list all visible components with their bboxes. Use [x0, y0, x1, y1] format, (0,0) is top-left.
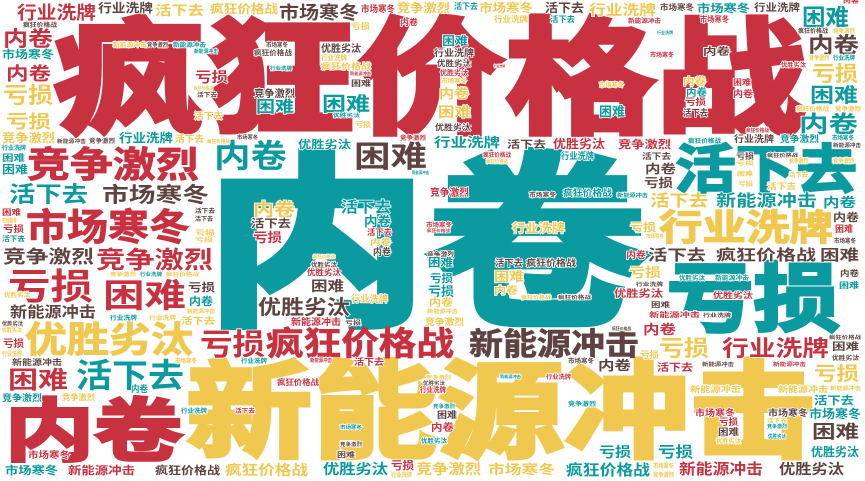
small words: inside 内卷: 亏损: [195, 228, 215, 239]
small words: right of 内卷 and around 活下去: 新能源冲击: [716, 187, 817, 211]
small words: bottom edge: 行业洗牌: [391, 470, 412, 479]
small words: left column: 疯狂价格战: [166, 271, 199, 278]
small words: right side middle: 内卷: [626, 248, 646, 261]
word: 内卷 red: 内卷: [5, 376, 183, 475]
word: 行业洗牌 yellow: 行业洗牌: [659, 199, 833, 251]
word: 困难 brown centre: 困难: [354, 132, 427, 176]
small words: inside and around 疯 and 狂: [57, 17, 418, 152]
small words: inside 新能源冲击: 困难: [437, 408, 457, 421]
small words: inside 战 and upper right: [650, 26, 861, 149]
small words: inside 新能源冲击: 市场寒冬: [695, 406, 735, 419]
small words: top edge: 活下去: [454, 1, 478, 12]
small words: right side middle: 疯狂价格战: [612, 325, 631, 332]
small words: bottom edge: 市场寒冬: [488, 459, 555, 478]
small words: inside 新能源冲击: 困难: [812, 418, 859, 444]
small words: right side middle: 新能源冲击: [715, 273, 749, 282]
small words: inside 内卷: 行业洗牌: [351, 292, 388, 305]
small words: inside 战 and upper right: 竞争激烈: [835, 104, 861, 113]
word: 亏损 red left: 亏损: [8, 258, 93, 310]
small words: inside 内卷: 优胜劣汰: [307, 267, 341, 278]
small words: left column: 内卷: [189, 293, 213, 309]
small words: inside 内卷: 亏损: [345, 318, 361, 327]
small words: inside 内卷: 活下去: [195, 214, 213, 223]
small words: top edge: 市场寒冬: [700, 14, 729, 25]
small words: right of 内卷 and around 活下去: 亏损: [736, 160, 754, 167]
small words: inside and around 疯 and 狂: 疯狂价格战: [207, 138, 230, 145]
small words: inside 新能源冲击: 活下去: [657, 359, 693, 374]
small words: inside 内卷: 亏损: [430, 270, 453, 286]
small words: inside 新能源冲击: 新能源冲击: [778, 384, 828, 395]
small words: bottom edge: 市场寒冬: [5, 462, 58, 478]
small words: right of 内卷 and around 活下去: 市场寒冬: [646, 233, 664, 240]
small words: inside 战 and upper right: 内卷: [733, 87, 753, 100]
small words: inside and around 疯 and 狂: 亏损: [195, 67, 228, 87]
small words: inside 内卷: 疯狂价格战: [526, 256, 576, 269]
small words: inside 内卷: 疯狂价格战: [521, 294, 551, 301]
small words: inside 价 and 格: 困难: [599, 101, 625, 120]
small words: inside 内卷: 亏损: [253, 227, 282, 246]
small words: inside 内卷: 竞争激烈: [427, 250, 454, 260]
small words: inside 新能源冲击: 活下去: [814, 392, 854, 408]
small words: inside 新能源冲击: 行业洗牌: [420, 385, 446, 395]
small words: inside 战 and upper right: 内卷: [683, 73, 706, 88]
small words: inside and around 疯 and 狂: 行业洗牌: [119, 129, 173, 146]
small words: bottom edge: 疯狂价格战: [155, 462, 220, 478]
small words: left column: 竞争激烈: [2, 129, 55, 146]
small words: inside 新能源冲击: 市场寒冬: [809, 405, 861, 422]
small words: left column: 行业洗牌: [2, 143, 26, 152]
small words: left column: 优胜劣汰: [4, 290, 30, 299]
small words: top edge: 疯狂价格战: [210, 0, 278, 17]
small words: inside 新能源冲击: 市场寒冬: [340, 424, 362, 431]
small words: top edge: 活下去: [550, 14, 575, 25]
small words: inside 新能源冲击: 优胜劣汰: [811, 443, 859, 460]
small words: right side middle: 优胜劣汰: [679, 273, 705, 282]
small words: inside 价 and 格: 行业洗牌: [434, 132, 500, 151]
small words: inside 新能源冲击: 内卷: [431, 419, 454, 434]
small words: right of 内卷 and around 活下去: 活下去: [789, 170, 808, 179]
small words: top edge: 市场寒冬: [660, 2, 694, 13]
small words: inside and around 疯 and 狂: 疯狂价格战: [321, 61, 371, 72]
small words: inside 战 and upper right: 行业洗牌: [657, 29, 673, 36]
small words: top edge: 行业洗牌: [589, 0, 656, 20]
small words: inside 战 and upper right: 疯狂价格战: [746, 127, 769, 134]
word: 新能源冲击: 新能源冲击: [186, 326, 816, 480]
small words: bottom edge: [5, 457, 844, 480]
small words: right of 内卷 and around 活下去: 困难: [835, 222, 853, 235]
word: 内卷 teal upper: 内卷: [214, 131, 287, 177]
small words: inside 新能源冲击: 疯狂价格战: [277, 377, 319, 388]
small words: left column: 亏损: [3, 222, 24, 235]
small words: inside and around 疯 and 狂: 内卷: [400, 17, 418, 28]
small words: left column: 活下去: [235, 406, 255, 415]
small words: inside 新能源冲击: 新能源冲击: [702, 361, 734, 368]
small words: inside 内卷: 活下去: [195, 206, 215, 215]
small words: right side middle: 优胜劣汰: [713, 290, 753, 301]
word: 内卷 large teal: 内卷: [206, 95, 648, 363]
small words: inside 新能源冲击: 内卷: [598, 355, 631, 374]
word: 新能源冲击 brown: 新能源冲击: [469, 319, 639, 364]
small words: inside and around 疯 and 狂: 市场寒冬: [266, 40, 288, 49]
small words: top edge: 行业洗牌: [494, 14, 528, 25]
small words: right side middle: [612, 244, 861, 363]
small words: left column: 行业洗牌: [2, 349, 22, 358]
small words: inside 价 and 格: 行业洗牌: [494, 63, 505, 68]
small words: inside 新能源冲击: 竞争激烈: [340, 441, 362, 448]
small words: right side middle: 内卷: [643, 319, 676, 338]
small words: left column: 竞争激烈: [62, 392, 95, 403]
small words: left column: [2, 20, 267, 461]
word: 疯狂价格战 red medium: 疯狂价格战: [266, 317, 454, 365]
small words: inside 新能源冲击: 新能源冲击: [830, 385, 861, 392]
small words: right of 内卷 and around 活下去: 疯狂价格战: [767, 152, 798, 159]
small words: inside and around 疯 and 狂: 市场寒冬: [237, 134, 258, 141]
small words: inside 价 and 格: 优胜劣汰: [440, 68, 468, 78]
small words: bottom edge: 疯狂价格战: [566, 459, 650, 480]
small words: inside 战 and upper right: 优胜劣汰: [781, 60, 806, 69]
small words: inside 新能源冲击: 亏损: [814, 359, 859, 386]
small words: inside 新能源冲击: 新能源冲击: [773, 361, 806, 368]
small words: left column: 优胜劣汰: [2, 319, 23, 328]
small words: right side middle: 内卷: [840, 268, 859, 279]
small words: right side middle: 困难: [820, 244, 859, 265]
small words: bottom edge: 市场寒冬: [653, 461, 674, 470]
small words: inside 内卷: 内卷: [370, 237, 391, 248]
small words: inside 内卷: 疯狂价格战: [483, 150, 511, 159]
small words: inside 内卷: 内卷: [373, 245, 391, 258]
small words: inside 新能源冲击: 新能源冲击: [500, 373, 521, 380]
small words: inside 价 and 格: [400, 32, 671, 152]
small words: right side middle: 困难: [651, 300, 670, 310]
small words: inside 战 and upper right: 市场寒冬: [650, 50, 674, 59]
small words: inside 新能源冲击: 活下去: [354, 355, 384, 368]
small words: right of 内卷 and around 活下去: [630, 151, 859, 245]
small words: left column: 行业洗牌: [110, 313, 137, 322]
small words: inside 战 and upper right: 市场寒冬: [832, 133, 854, 142]
small words: inside 新能源冲击: 竞争激烈: [568, 399, 596, 408]
small words: inside 内卷: 困难: [311, 276, 344, 296]
small words: inside 内卷: 行业洗牌: [561, 149, 594, 162]
small words: inside 新能源冲击: 行业洗牌: [546, 372, 571, 381]
small words: inside 新能源冲击: 竞争激烈: [767, 423, 787, 430]
small words: left column: 市场寒冬: [175, 356, 197, 365]
small words: right side middle: 亏损: [640, 348, 659, 361]
small words: inside 战 and upper right: 竞争激烈: [780, 132, 819, 145]
small words: right side middle: 疯狂价格战: [829, 334, 861, 341]
small words: inside 战 and upper right: 疯狂价格战: [798, 26, 828, 35]
small words: right side middle: 困难: [832, 338, 859, 353]
small words: right of 内卷 and around 活下去: 竞争激烈: [833, 156, 854, 165]
small words: inside 内卷: 疯狂价格战: [427, 227, 450, 234]
small words: left column: 内卷: [6, 60, 51, 86]
small words: right of 内卷 and around 活下去: 亏损: [644, 174, 673, 191]
small words: inside 价 and 格: 行业洗牌: [434, 46, 474, 59]
word: 竞争激烈 red: 竞争激烈: [27, 136, 199, 188]
small words: inside 战 and upper right: 内卷: [686, 84, 707, 99]
small words: inside 新能源冲击: 亏损: [599, 442, 631, 462]
small words: right of 内卷 and around 活下去: 内卷: [823, 192, 856, 211]
small words: left column: 新能源冲击: [187, 308, 215, 315]
small words: inside and around 疯 and 狂: 新能源冲击: [57, 138, 86, 145]
small words: inside and around 疯 and 狂: 竞争激烈: [147, 40, 168, 49]
small words: inside 战 and upper right: 内卷: [808, 28, 859, 60]
small words: left column: 行业洗牌: [140, 271, 162, 278]
small words: left column: 亏损: [3, 78, 53, 110]
small words: inside and around 疯 and 狂: 新能源冲击: [173, 40, 206, 49]
small words: left column: 竞争激烈: [3, 243, 94, 269]
small words: inside 内卷: 优胜劣汰: [258, 291, 350, 320]
small words: inside 内卷: 竞争激烈: [425, 315, 464, 328]
word: 优胜劣汰 yellow: 优胜劣汰: [25, 311, 193, 363]
small words: inside 价 and 格: 竞争激烈: [618, 136, 671, 152]
small words: bottom edge: 竞争激烈: [653, 470, 674, 479]
small words: bottom edge: 新能源冲击: [679, 458, 763, 479]
small words: inside 战 and upper right: 行业洗牌: [833, 53, 855, 62]
small words: left column: 活下去: [2, 234, 25, 244]
small words: inside 价 and 格: 竞争激烈: [400, 133, 426, 142]
small words: inside 内卷: 市场寒冬: [426, 220, 452, 229]
small words: inside 价 and 格: 市场寒冬: [599, 80, 624, 89]
small words: inside 内卷: 竞争激烈: [430, 184, 469, 199]
small words: left column: 亏损: [3, 335, 24, 350]
small words: inside 新能源冲击: 竞争激烈: [426, 374, 451, 381]
small words: inside 内卷: 亏损: [428, 281, 454, 300]
small words: inside and around 疯 and 狂: 竞争激烈: [254, 85, 295, 100]
small words: right of 内卷 and around 活下去: 亏损: [738, 179, 753, 188]
small words: inside and around 疯 and 狂: 困难: [256, 93, 294, 117]
small words: inside 内卷: 优胜劣汰: [311, 260, 337, 269]
small words: inside and around 疯 and 狂: 困难: [322, 88, 370, 117]
word: 亏损 teal: 亏损: [667, 238, 840, 347]
small words: inside 新能源冲击: 亏损: [719, 415, 738, 428]
small words: right side middle: 活下去: [648, 244, 706, 265]
small words: left column: 竞争激烈: [2, 391, 42, 404]
small words: inside and around 疯 and 狂: 新能源冲击: [350, 70, 371, 77]
small words: inside 价 and 格: 内卷: [439, 83, 469, 102]
small words: inside 新能源冲击: 困难: [337, 450, 355, 460]
small words: right side middle: 困难: [839, 280, 859, 291]
small words: inside 新能源冲击: 活下去: [767, 416, 787, 425]
small words: right side middle: 行业洗牌: [722, 331, 829, 363]
small words: inside 价 and 格: 市场寒冬: [441, 76, 467, 85]
small words: left column: 亏损: [6, 108, 51, 134]
small words: left column: 竞争激烈: [96, 240, 213, 275]
small words: inside 内卷: 内卷: [253, 196, 295, 222]
small words: inside 新能源冲击: 优胜劣汰: [423, 380, 445, 387]
small words: inside and around 疯 and 狂: 竞争激烈: [89, 136, 115, 145]
word: 活下去 teal lower left: 活下去: [76, 349, 184, 397]
small words: inside 内卷: 新能源冲击: [412, 169, 429, 176]
small words: inside 价 and 格: 困难: [442, 32, 468, 49]
small words: inside 内卷: 行业洗牌: [512, 219, 565, 236]
small words: inside 战 and upper right: 竞争激烈: [809, 53, 829, 62]
small words: left column: 新能源冲击: [10, 301, 96, 322]
small words: inside 价 and 格: 优胜劣汰: [553, 135, 605, 152]
small words: inside and around 疯 and 狂: 行业洗牌: [270, 65, 292, 72]
small words: inside 内卷: 亏损: [195, 235, 213, 244]
small words: inside 战 and upper right: 行业洗牌: [734, 132, 774, 145]
small words: inside 价 and 格: 优胜劣汰: [435, 122, 471, 133]
small words: inside 新能源冲击: 市场寒冬: [568, 356, 594, 365]
small words: inside 战 and upper right: 竞争激烈: [833, 26, 855, 35]
small words: inside 内卷: 新能源冲击: [427, 308, 458, 315]
small words: right of 内卷 and around 活下去: 活下去: [650, 187, 708, 211]
word: 市场寒冬 red: 市场寒冬: [26, 197, 190, 251]
small words: left column: 新能源冲击: [12, 357, 62, 368]
small words: right of 内卷 and around 活下去: 竞争激烈: [789, 156, 808, 165]
small words: inside and around 疯 and 狂: 疯狂价格战: [254, 48, 292, 58]
small words: inside 新能源冲击: 竞争激烈: [433, 403, 455, 410]
small words: left column: 行业洗牌: [181, 406, 207, 415]
small words: right side middle: 优胜劣汰: [614, 285, 663, 300]
small words: inside 内卷: 活下去: [495, 256, 523, 269]
small words: inside 内卷: 困难: [428, 254, 453, 270]
small words: inside 内卷: 新能源冲击: [291, 315, 341, 328]
small words: right of 内卷 and around 活下去: 困难: [737, 169, 753, 178]
small words: left column: 行业洗牌: [241, 356, 267, 365]
small words: inside and around 疯 and 狂: 活下去: [194, 109, 223, 122]
small words: inside 价 and 格: 困难: [438, 102, 471, 122]
small words: right side middle: 亏损: [629, 262, 661, 281]
small words: inside 内卷: 新能源冲击: [617, 192, 648, 199]
small words: left column: 亏损: [188, 279, 215, 295]
small words: left column: 优胜劣汰: [2, 325, 22, 334]
small words: left column: 市场寒冬: [102, 179, 209, 209]
small words: left column: 困难: [8, 360, 68, 395]
small words: bottom edge: 优胜劣汰: [779, 459, 844, 479]
small words: inside 新能源冲击: 新能源冲击: [690, 384, 741, 395]
small words: left column: 市场寒冬: [2, 216, 17, 225]
small words: inside 价 and 格: 优胜劣汰: [437, 58, 471, 69]
word: 活下去 teal: 活下去: [675, 128, 857, 204]
small words: left column: 困难: [2, 161, 28, 177]
small words: inside 新能源冲击: 优胜劣汰: [768, 433, 786, 440]
small words: right of 内卷 and around 活下去: 亏损: [630, 219, 656, 235]
small words: inside 战 and upper right: 疯狂价格战: [796, 104, 829, 113]
small words: inside 内卷: 困难: [494, 266, 524, 285]
small words: left column: 内卷: [3, 23, 53, 53]
small words: left column: 市场寒冬: [28, 448, 70, 461]
small words: inside 内卷: 内卷: [429, 294, 453, 309]
small words: right of 内卷 and around 活下去: 市场寒冬: [834, 236, 856, 245]
small words: right of 内卷 and around 活下去: 亏损: [736, 151, 754, 162]
small words: left column: 困难: [2, 151, 25, 164]
small words: inside and around 疯 and 狂: 亏损: [355, 120, 371, 130]
small words: inside and around 疯 and 狂: 优胜劣汰: [333, 112, 360, 119]
small words: top edge: [17, 0, 859, 33]
small words: inside 内卷: 疯狂价格战: [563, 186, 612, 199]
small words: inside 内卷: 内卷: [364, 211, 391, 230]
small words: left column: 活下去: [9, 177, 88, 209]
small words: right side middle: 行业洗牌: [636, 281, 663, 288]
small words: inside 新能源冲击: 市场寒冬: [768, 406, 808, 419]
small words: inside and around 疯 and 狂: 优胜劣汰: [321, 40, 361, 55]
small words: bottom edge: 亏损: [391, 457, 414, 473]
small words: right of 内卷 and around 活下去: 活下去: [767, 181, 796, 192]
small words: inside 内卷: 活下去: [251, 215, 291, 231]
small words: right of 内卷 and around 活下去: 内卷: [833, 209, 859, 225]
small words: left column: 活下去: [181, 314, 215, 327]
small words: inside 新能源冲击: 优胜劣汰: [716, 436, 741, 445]
small words: top edge: 市场寒冬: [697, 0, 750, 16]
small words: inside and around 疯 and 狂: 新能源冲击: [194, 48, 218, 55]
small words: right of 内卷 and around 活下去: 内卷: [645, 160, 676, 177]
small words: inside 战 and upper right: 困难: [810, 79, 858, 108]
small words: bottom edge: 竞争激烈: [416, 459, 481, 479]
small words: inside 内卷: 活下去: [367, 227, 392, 238]
small words: inside 新能源冲击: 优胜劣汰: [421, 436, 447, 445]
small words: inside and around 疯 and 狂: 困难: [351, 78, 371, 89]
small words: left column: 亏损: [200, 320, 265, 364]
small words: inside and around 疯 and 狂: 疯狂价格战: [194, 85, 213, 92]
small words: right side middle: 疯狂价格战: [716, 244, 816, 265]
small words: inside 战 and upper right: 活下去: [683, 106, 708, 119]
small words: inside 内卷: 疯狂价格战: [486, 158, 508, 165]
small words: inside 新能源冲击: 新能源冲击: [310, 357, 332, 364]
small words: inside and around 疯 and 狂: 新能源冲击: [113, 40, 147, 49]
small words: right side middle: 新能源冲击: [649, 310, 700, 320]
small words: left column: 困难: [2, 207, 21, 218]
small words: inside 内卷: 活下去: [341, 196, 391, 217]
small words: inside and around 疯 and 狂: 优胜劣汰: [298, 136, 351, 152]
small words: inside 新能源冲击: 亏损: [658, 441, 693, 462]
small words: inside and around 疯 and 狂: 行业洗牌: [321, 53, 347, 63]
small words: bottom edge: 优胜劣汰: [323, 459, 388, 479]
small words: right side middle: 行业洗牌: [703, 312, 731, 319]
small words: right side middle: 亏损: [659, 331, 709, 363]
small words: inside 战 and upper right: 疯狂价格战: [688, 136, 721, 145]
small words: left column: 疯狂价格战: [23, 20, 57, 29]
small words: inside 新能源冲击: [277, 355, 861, 462]
small words: inside 价 and 格: 活下去: [507, 136, 546, 151]
small words: inside and around 疯 and 狂: 活下去: [197, 90, 217, 99]
small words: right side middle: 优胜劣汰: [832, 353, 859, 362]
small words: inside 战 and upper right: 亏损: [685, 95, 706, 108]
small words: top edge: 新能源冲击: [628, 16, 661, 25]
small words: inside 战 and upper right: 新能源冲击: [833, 142, 861, 149]
small words: left column: 市场寒冬: [2, 46, 54, 62]
small words: inside 战 and upper right: 亏损: [812, 58, 858, 88]
small words: left column: 内卷: [131, 382, 148, 395]
small words: left column: 行业洗牌: [149, 313, 176, 322]
small words: inside 内卷: 市场寒冬: [529, 190, 556, 199]
small words: right of 内卷 and around 活下去: 活下去: [642, 151, 671, 162]
small words: inside 战 and upper right: 内卷: [703, 43, 730, 58]
small words: top edge: 活下去: [155, 0, 204, 19]
small words: inside 新能源冲击: 困难: [718, 425, 739, 438]
word: 困难 red left: 困难: [103, 269, 186, 317]
small words: inside 内卷: [195, 149, 648, 328]
small words: inside and around 疯 and 狂: 亏损: [351, 21, 370, 32]
small words: inside 战 and upper right: 困难: [733, 77, 751, 88]
small words: bottom edge: 疯狂价格战: [225, 460, 308, 480]
small words: inside 内卷: 疯狂价格战: [558, 294, 591, 301]
small words: inside 内卷: 内卷: [494, 282, 518, 297]
small words: top edge: 市场寒冬: [361, 2, 395, 15]
small words: left column: 竞争激烈: [110, 271, 136, 278]
small words: bottom edge: 新能源冲击: [68, 462, 135, 478]
small words: inside 战 and upper right: 内卷: [799, 105, 858, 139]
small words: inside and around 疯 and 狂: 活下去: [175, 132, 204, 145]
small words: inside 内卷: 疯狂价格战: [313, 253, 335, 260]
